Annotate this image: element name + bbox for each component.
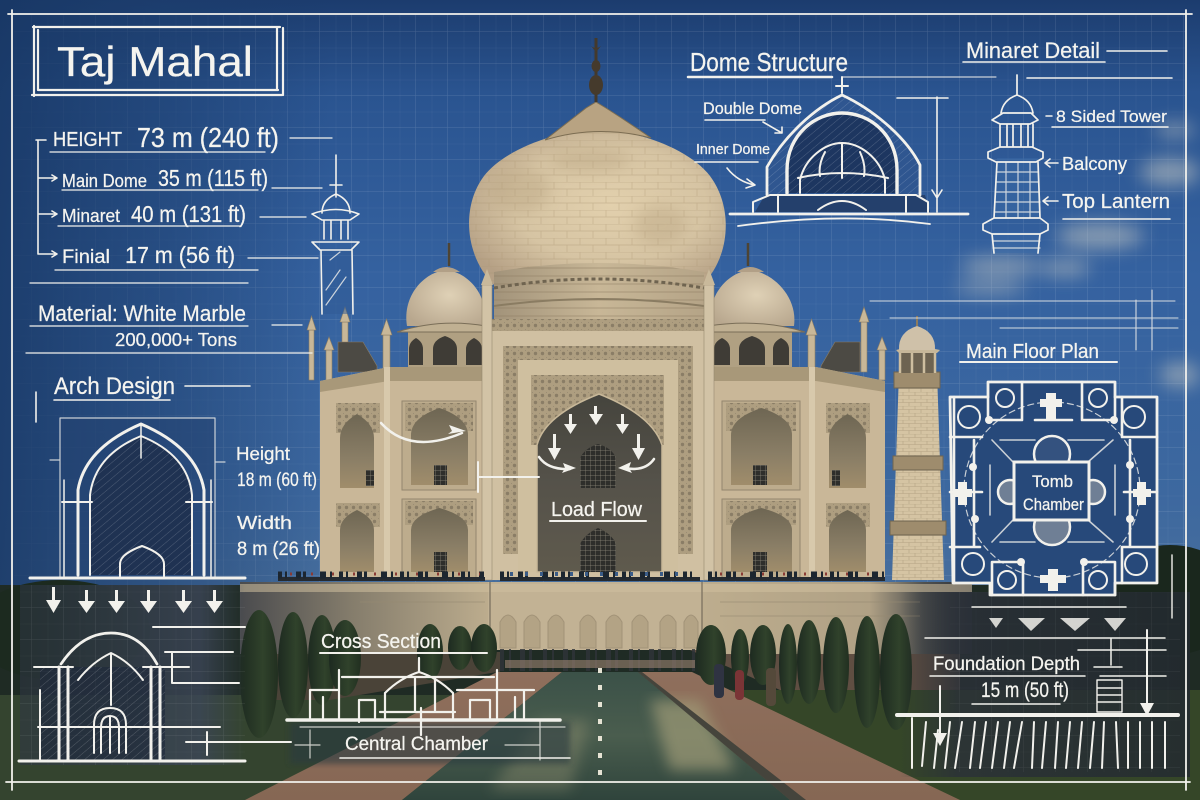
main dome height: Main Dome xyxy=(62,171,147,191)
floor plan drawing xyxy=(950,382,1157,595)
tomb chamber label: Tomb xyxy=(1032,472,1073,491)
arch drawing xyxy=(30,418,245,578)
visitors on walkway xyxy=(714,664,776,706)
lower left elevation sketch xyxy=(19,627,291,761)
minaret height: Minaret xyxy=(62,206,120,226)
arch width value: 8 m (26 ft) xyxy=(237,539,320,560)
arch width label: Width xyxy=(237,513,292,533)
dome structure panel xyxy=(688,47,996,226)
dome heading: Dome Structure xyxy=(690,47,848,77)
foundation depth value: 15 m (50 ft) xyxy=(981,679,1069,702)
right minaret xyxy=(890,316,946,580)
dome section drawing xyxy=(730,77,996,226)
foundation drawing xyxy=(897,607,1178,768)
tomb chamber label: Chamber xyxy=(1023,495,1084,514)
foundation depth label: Foundation Depth xyxy=(933,654,1080,675)
corner pinnacles xyxy=(307,307,887,380)
floor plan panel xyxy=(950,341,1157,595)
arch height value: 18 m (60 ft) xyxy=(237,470,317,491)
right wing xyxy=(711,367,885,580)
dome finial xyxy=(545,38,651,140)
arch heading: Arch Design xyxy=(54,373,175,400)
left side shading xyxy=(0,0,330,600)
double dome label: Double Dome xyxy=(703,99,802,118)
visitors on terrace xyxy=(278,574,885,579)
cross section panel xyxy=(287,631,570,760)
tomb chamber label xyxy=(1023,472,1084,514)
main dome height: 35 m (115 ft) xyxy=(158,165,268,191)
cypress trees xyxy=(240,610,912,738)
main dome height xyxy=(62,165,268,191)
central chamber label: Central Chamber xyxy=(345,734,489,755)
left minaret sketch xyxy=(312,155,359,314)
cross section heading: Cross Section xyxy=(321,631,441,653)
side domes xyxy=(397,243,805,367)
ground and background trees xyxy=(0,545,1200,800)
load arrows under arch xyxy=(46,587,223,613)
foundation panel xyxy=(897,607,1178,768)
drum xyxy=(494,263,704,319)
minaret height xyxy=(62,201,246,227)
blueprint overlay: lower left xyxy=(20,585,245,765)
title frame xyxy=(32,26,283,96)
load leader xyxy=(478,462,539,492)
drafting lines upper right xyxy=(870,290,1178,350)
inner dome label: Inner Dome xyxy=(696,141,770,158)
minaret height: 40 m (131 ft) xyxy=(131,201,246,227)
title: Taj Mahal xyxy=(57,38,253,85)
blueprint sky background xyxy=(0,0,1200,620)
main dome xyxy=(469,130,726,285)
title block xyxy=(32,26,283,96)
drafting lines right edge xyxy=(1171,555,1173,618)
balcony label: Balcony xyxy=(1062,154,1127,174)
minaret drawing xyxy=(983,75,1048,253)
floor plan heading: Main Floor Plan xyxy=(966,341,1099,363)
underlines xyxy=(30,138,332,283)
arch design panel xyxy=(30,373,320,613)
arch height label: Height xyxy=(236,444,290,464)
height total: HEIGHT xyxy=(53,129,122,151)
finial height xyxy=(62,242,235,268)
blueprint overlay: cross section xyxy=(290,722,570,764)
reflecting pool and walkways xyxy=(245,660,960,800)
foundation triangles xyxy=(989,618,1126,631)
load flow label: Load Flow xyxy=(551,499,643,521)
height total xyxy=(53,122,279,153)
cross section drawing xyxy=(287,658,565,760)
minaret detail panel xyxy=(963,38,1172,253)
load curved arrows xyxy=(381,423,654,469)
load flow annotation xyxy=(381,406,654,521)
grid over lower panels xyxy=(20,585,1180,772)
height bracket xyxy=(36,140,57,257)
minaret heading: Minaret Detail xyxy=(966,38,1100,63)
building plinth xyxy=(240,582,972,654)
height total: 73 m (240 ft) xyxy=(137,122,279,153)
clouds xyxy=(954,123,1200,387)
eight sided tower label: 8 Sided Tower xyxy=(1056,107,1167,126)
material note: Material: White Marble xyxy=(38,301,246,326)
central portal xyxy=(481,269,715,580)
material note: 200,000+ Tons xyxy=(115,330,237,350)
left wing xyxy=(320,367,486,580)
finial height: 17 m (56 ft) xyxy=(125,242,235,268)
main building xyxy=(278,38,946,580)
top lantern label: Top Lantern xyxy=(1062,191,1170,213)
load arrows in arch xyxy=(448,406,645,473)
blueprint overlay: lower right xyxy=(900,592,1190,777)
material note xyxy=(26,301,312,353)
height dimensions xyxy=(30,122,332,283)
finial height: Finial xyxy=(62,247,110,268)
